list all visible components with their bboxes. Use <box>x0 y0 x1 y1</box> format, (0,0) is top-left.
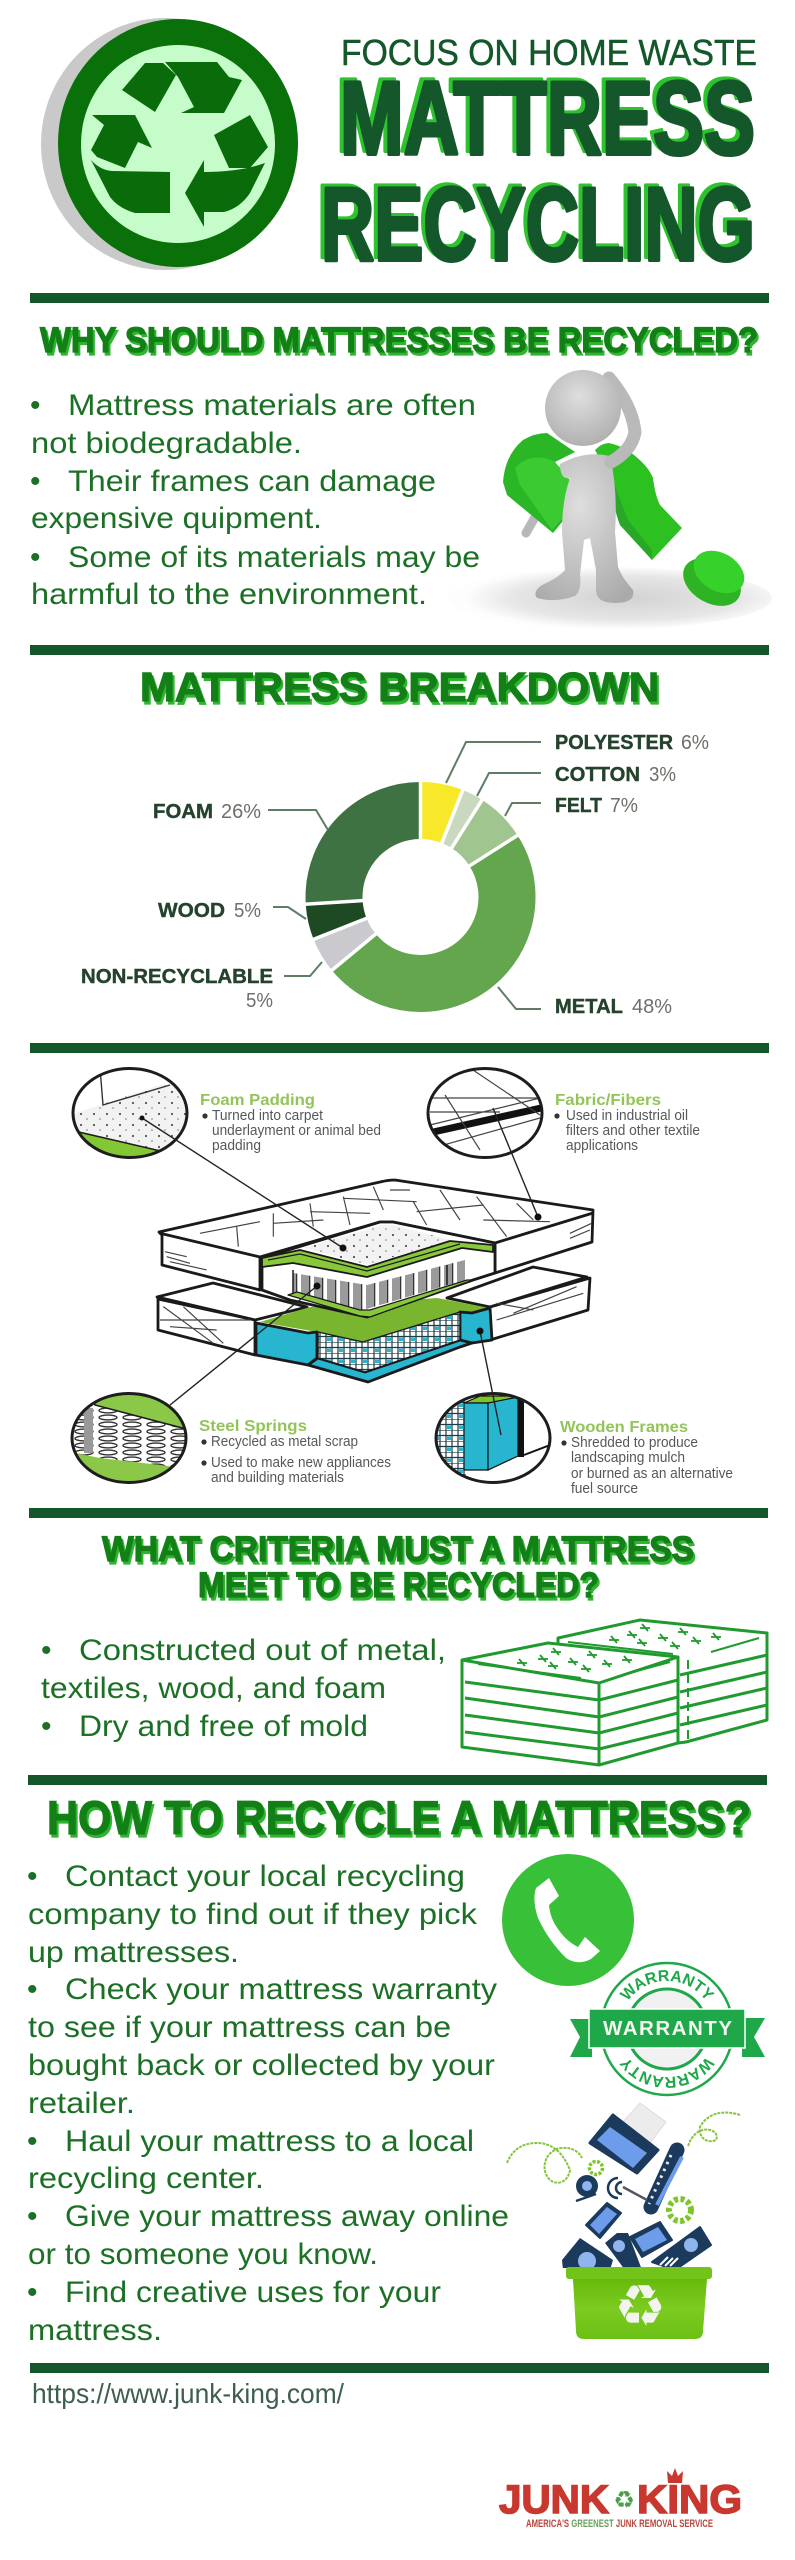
bullet text <box>41 1634 446 1743</box>
logo: junk king: ♻ <box>613 2486 635 2514</box>
source url: https://www.junk-king.com/ <box>32 2378 344 2409</box>
panel: mattress anatomy diagram <box>70 1068 733 1497</box>
logo: junk king: JUNK <box>499 2478 609 2522</box>
left arm behind <box>526 470 562 533</box>
icon: e-waste recycling bin: ♻ <box>614 2272 666 2340</box>
chart labels: 48% <box>632 996 672 1018</box>
bullet text: • <box>30 389 41 422</box>
icon: warranty badge: WARRANTY <box>603 2017 732 2040</box>
bullet text: • <box>30 465 41 498</box>
chart labels: 26% <box>221 801 261 823</box>
icon: phone <box>502 1854 634 1986</box>
callout: wooden frames: or burned as an alternative <box>571 1466 733 1482</box>
bullet text: not biodegradable. <box>31 427 302 460</box>
callout: steel springs: and building materials <box>211 1470 344 1486</box>
chart labels: 6% <box>681 732 709 754</box>
chart labels: 3% <box>649 764 676 786</box>
panel: mattress breakdown <box>81 664 709 1018</box>
callout: steel springs <box>70 1282 391 1490</box>
callout: wooden frames: landscaping mulch <box>571 1450 685 1466</box>
bullet text: recycling center. <box>28 2162 264 2195</box>
panel: recycling criteria <box>41 1530 767 1765</box>
bullet text: harmful to the environment. <box>31 578 427 611</box>
illustration: layered mattress <box>157 1180 593 1382</box>
icon: e-waste recycling bin <box>507 2103 740 2340</box>
bullet text: Give your mattress away online <box>65 2200 509 2233</box>
bullet text: Contact your local recycling <box>65 1860 465 1893</box>
callout: steel springs: Steel Springs <box>199 1418 307 1435</box>
chart labels: WOOD <box>158 900 225 922</box>
bullet text: bought back or collected by your <box>28 2049 495 2082</box>
bullet text: Check your mattress warranty <box>65 1973 497 2006</box>
heading: MEET TO BE RECYCLED? <box>198 1566 599 1605</box>
bullet text: expensive quipment. <box>31 502 322 535</box>
chart labels: POLYESTER <box>555 732 674 754</box>
callout: wooden frames <box>436 1328 733 1497</box>
heading: HOW TO RECYCLE A MATTRESS? <box>47 1791 751 1844</box>
chart labels <box>81 732 709 1018</box>
heading <box>102 1530 694 1605</box>
bullet text: Their frames can damage <box>68 465 436 498</box>
bullet text: • <box>27 2276 38 2309</box>
callout: foam padding: Foam Padding <box>200 1092 315 1109</box>
bullet text: • <box>27 1860 38 1893</box>
chart labels: METAL <box>555 996 623 1018</box>
callout: foam padding: padding <box>212 1138 261 1154</box>
bullet text: • <box>27 2125 38 2158</box>
chart labels: 5% <box>246 990 273 1012</box>
callout: steel springs: Used to make new appliances <box>211 1455 391 1471</box>
chart labels: FELT <box>555 795 602 817</box>
heading: WHY SHOULD MATTRESSES BE RECYCLED? <box>40 321 758 360</box>
callout: wooden frames: Shredded to produce <box>571 1435 698 1451</box>
callout: foam padding: Turned into carpet <box>212 1108 323 1124</box>
bullet text: up mattresses. <box>28 1936 239 1969</box>
bullet text: mattress. <box>28 2314 162 2347</box>
panel: why recycle <box>30 321 772 629</box>
panel: how to recycle <box>27 1791 765 2347</box>
bullet text: Mattress materials are often <box>68 389 476 422</box>
bullet text: • <box>27 2200 38 2233</box>
callout: fabric fibers: applications <box>566 1138 638 1154</box>
callout: wooden frames: Wooden Frames <box>560 1419 688 1436</box>
callout: fabric fibers <box>420 1068 700 1220</box>
bullet text: Constructed out of metal, <box>79 1634 446 1667</box>
icon: thinking figure with question mark <box>448 370 772 629</box>
bullet text: Find creative uses for your <box>65 2276 441 2309</box>
bullet text: retailer. <box>28 2087 135 2120</box>
bullet text: to see if your mattress can be <box>28 2011 451 2044</box>
bottom mattress <box>157 1283 307 1320</box>
chart leaders <box>268 742 541 1009</box>
quilting <box>160 1187 592 1343</box>
top mattress <box>159 1180 593 1290</box>
bullet text: • <box>30 541 41 574</box>
chart labels: 5% <box>234 900 261 922</box>
heading: MATTRESS BREAKDOWN <box>140 664 659 710</box>
bullet text: • <box>41 1710 52 1743</box>
icon: warranty badge <box>570 1962 765 2096</box>
bullet text: • <box>27 1973 38 2006</box>
chart labels: FOAM <box>153 801 213 823</box>
callout: fabric fibers: Fabric/Fibers <box>555 1092 661 1109</box>
icon: warranty badge: WARRANTY <box>619 1970 715 2000</box>
icon: warranty badge: WARRANTY <box>619 2058 715 2088</box>
chart labels: NON-RECYCLABLE <box>81 966 273 988</box>
chart labels: COTTON <box>555 764 640 786</box>
logo: junk king: KING <box>637 2478 742 2522</box>
callout: fabric fibers: Used in industrial oil <box>566 1108 688 1124</box>
bullet text: textiles, wood, and foam <box>41 1672 386 1705</box>
logo: junk king <box>499 2468 742 2530</box>
bullet text: • <box>41 1634 52 1667</box>
bullet text: Haul your mattress to a local <box>65 2125 474 2158</box>
callout: fabric fibers: filters and other textile <box>566 1123 700 1139</box>
heading: WHAT CRITERIA MUST A MATTRESS <box>102 1530 694 1569</box>
subtitle: FOCUS ON HOME WASTE <box>341 32 757 73</box>
bullet text <box>30 389 480 611</box>
callout: foam padding: underlayment or animal bed <box>212 1123 381 1139</box>
title <box>321 32 757 283</box>
donut chart <box>299 775 524 984</box>
chart labels: 7% <box>610 795 638 817</box>
icon: recycling logo <box>41 18 298 270</box>
logo: junk king: AMERICA'S GREENEST JUNK REMOVAL SERVICE <box>526 2518 713 2530</box>
icon: mattress stack <box>462 1620 767 1765</box>
bullet text: Dry and free of mold <box>79 1710 368 1743</box>
callout: foam padding <box>70 1068 381 1252</box>
bullet text: Some of its materials may be <box>68 541 480 574</box>
callout: steel springs: Recycled as metal scrap <box>211 1434 358 1450</box>
bullet text <box>27 1860 509 2347</box>
bullet text: or to someone you know. <box>28 2238 378 2271</box>
callout: wooden frames: fuel source <box>571 1481 638 1497</box>
bullet text: company to find out if they pick <box>28 1898 478 1931</box>
